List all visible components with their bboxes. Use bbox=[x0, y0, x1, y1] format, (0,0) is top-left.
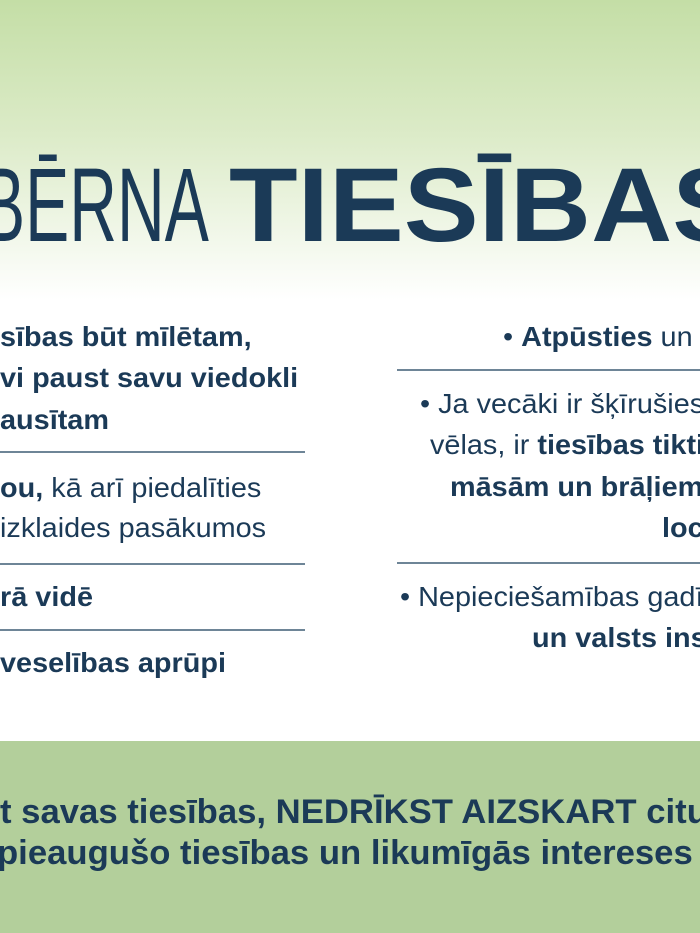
item 1: • Atpūsties un bbox=[503, 321, 693, 352]
right column list bbox=[397, 321, 700, 653]
item 2: ou, kā arī piedalīties bbox=[0, 472, 261, 503]
left column list: vi paust savu viedokli bbox=[0, 362, 298, 393]
bottom band bbox=[0, 741, 700, 933]
left column list: izklaides pasākumos bbox=[0, 512, 266, 543]
left column list: ausītam bbox=[0, 404, 109, 435]
title bbox=[0, 147, 700, 264]
item 4: veselības aprūpi bbox=[0, 647, 226, 678]
bottom statement: pieaugušo tiesības un likumīgās intereses bbox=[0, 834, 693, 872]
item 2: • Ja vecāki ir šķīrušies bbox=[420, 388, 700, 419]
bottom statement bbox=[0, 793, 700, 872]
left column list bbox=[0, 321, 305, 678]
bottom statement: t savas tiesības, NEDRĪKST AIZSKART citu bbox=[0, 793, 700, 831]
item 3: rā vidē bbox=[0, 581, 93, 612]
item 1: sības būt mīlētam, bbox=[0, 321, 252, 352]
right column list: māsām un brāļiem bbox=[450, 471, 700, 502]
